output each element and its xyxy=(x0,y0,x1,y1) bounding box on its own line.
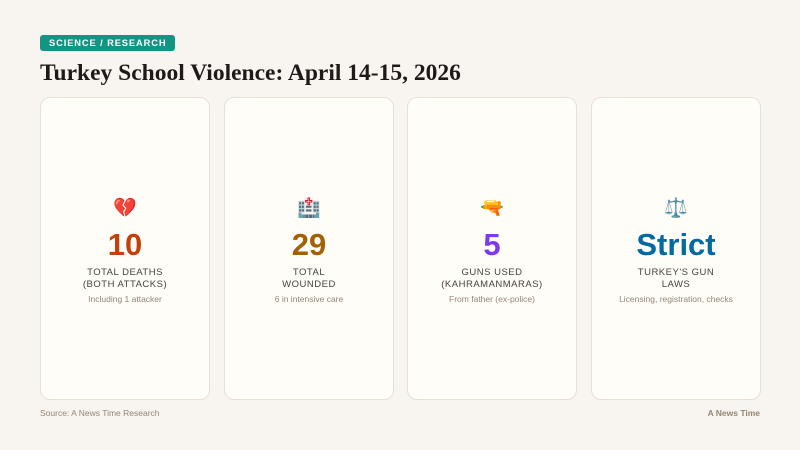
panel: deaths xyxy=(40,97,210,400)
title: Turkey School Violence: April 14-15, 2026 xyxy=(40,60,461,86)
panel: guns xyxy=(407,97,577,400)
panel: wounded xyxy=(224,97,394,400)
label: wounded xyxy=(282,267,336,290)
panel: gun laws xyxy=(591,97,761,400)
number: deaths: 10 xyxy=(108,227,142,262)
brand: A News Time xyxy=(708,408,760,418)
sub: deaths: Including 1 attacker xyxy=(88,294,162,304)
sub: laws: Licensing, registration, checks xyxy=(619,294,733,304)
icon: hospital: 🏥 xyxy=(297,197,321,219)
source: Source: A News Time Research xyxy=(40,408,160,418)
label: guns: (KAHRAMANMARAS) xyxy=(441,279,543,290)
label: laws: LAWS xyxy=(662,279,690,290)
label: deaths: (BOTH ATTACKS) xyxy=(83,279,167,290)
number: wounded: 29 xyxy=(292,227,326,262)
category tag xyxy=(40,35,175,51)
category tag: SCIENCE / RESEARCH xyxy=(49,38,166,48)
label: wounded: TOTAL xyxy=(293,267,325,278)
label: laws: TURKEY'S GUN xyxy=(638,267,714,278)
icon: scales: ⚖️ xyxy=(664,197,688,219)
label: wounded: WOUNDED xyxy=(282,279,336,290)
label: deaths: TOTAL DEATHS xyxy=(87,267,163,278)
number: guns: 5 xyxy=(483,227,501,262)
label: laws xyxy=(638,267,714,290)
label: guns xyxy=(441,267,543,290)
label: guns: GUNS USED xyxy=(462,267,522,278)
icon: pistol: 🔫 xyxy=(480,197,504,219)
sub: wounded: 6 in intensive care xyxy=(275,294,343,304)
number: strict: Strict xyxy=(636,227,716,262)
icon: broken heart: 💔 xyxy=(113,197,137,219)
sub: guns: From father (ex-police) xyxy=(449,294,535,304)
label: deaths xyxy=(83,267,167,290)
